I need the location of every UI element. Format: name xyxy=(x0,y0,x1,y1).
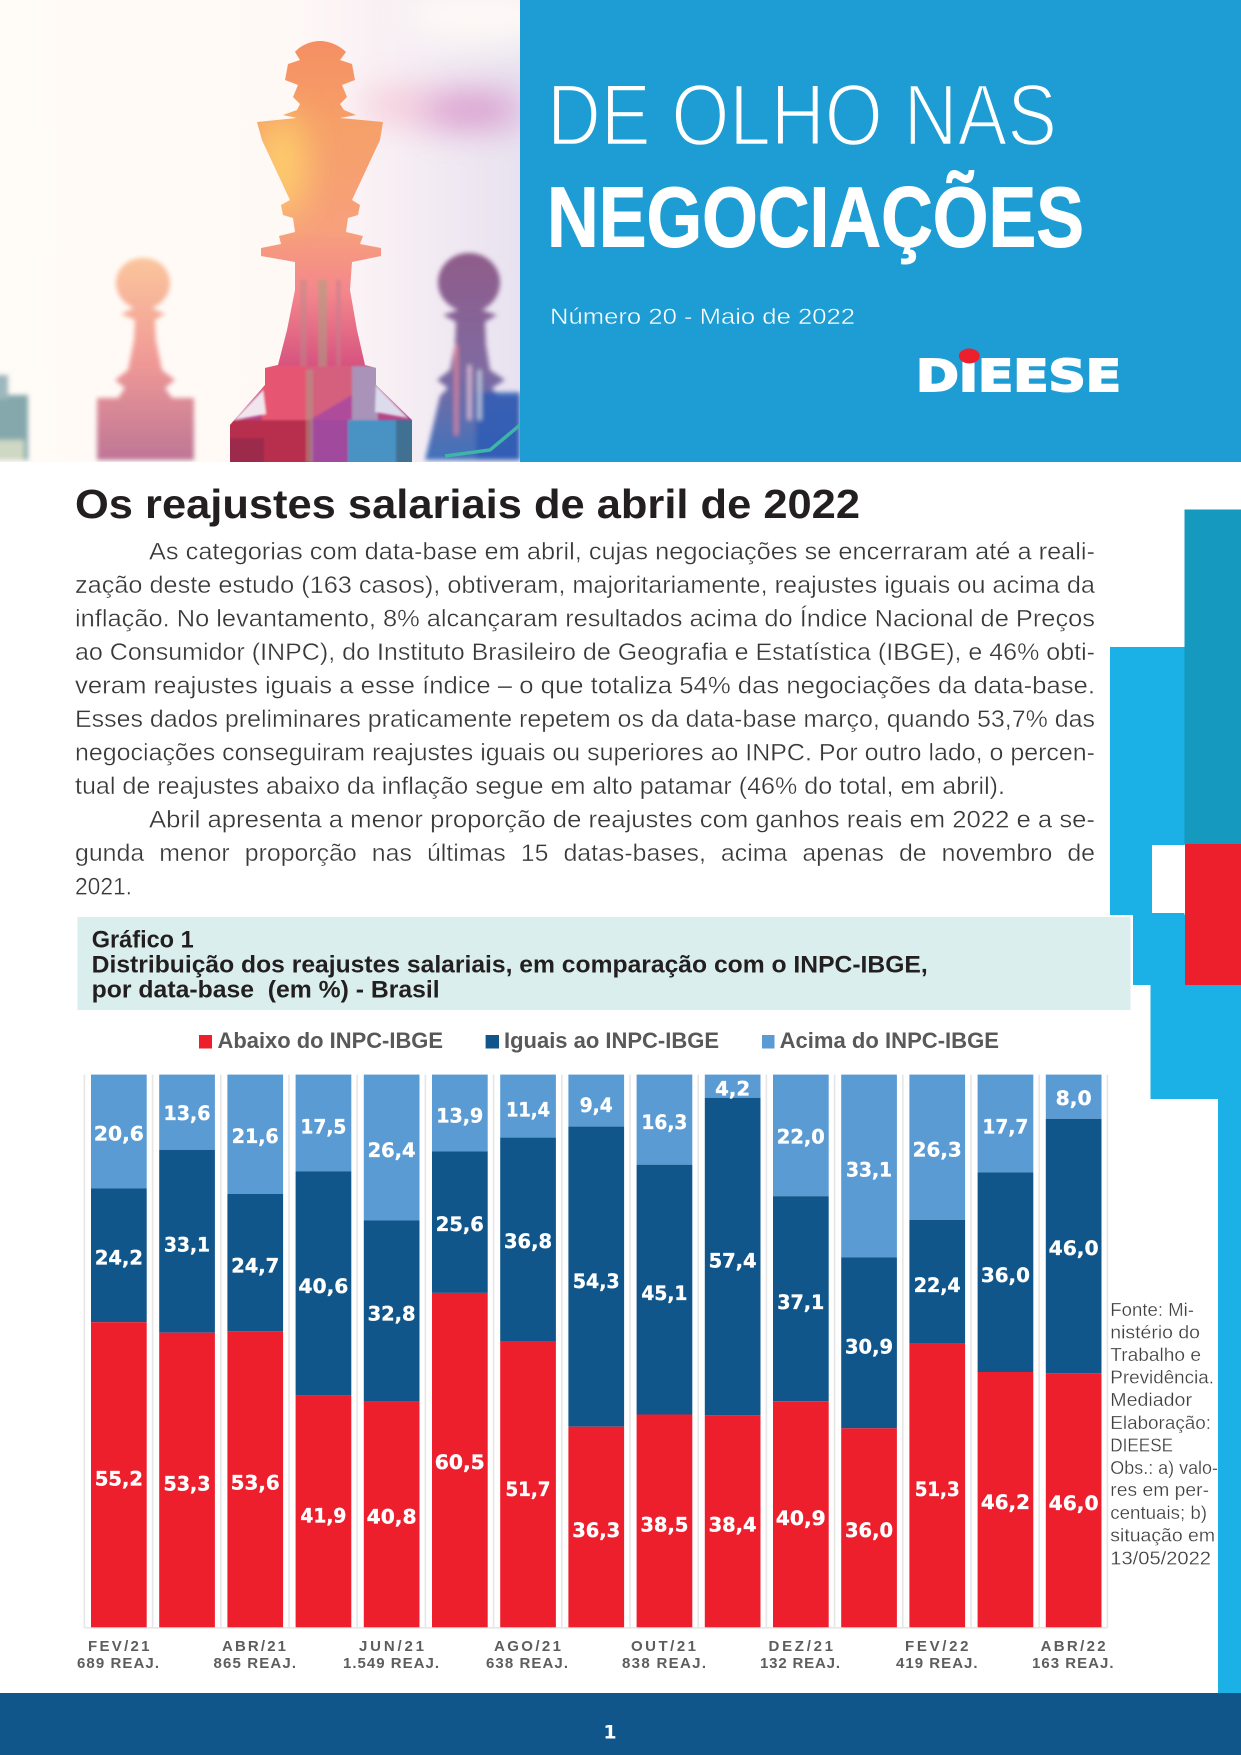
bar: ABR/22: 8,0 xyxy=(1056,1087,1092,1110)
source note: Obs.: a) valo- xyxy=(1110,1457,1218,1478)
x-axis labels: ABR/21 xyxy=(222,1638,286,1655)
source note: nistério do xyxy=(1110,1322,1200,1343)
icon: king chess piece xyxy=(225,35,420,465)
footer bar xyxy=(0,1693,1241,1755)
icon: right pawn xyxy=(425,253,520,460)
body text: negociações conseguiram reajustes iguais ou superiores ao INPC. Por outro lado, o percen- xyxy=(75,740,1095,767)
x-axis labels: 838 REAJ. xyxy=(622,1655,706,1672)
body text: Esses dados preliminares praticamente repetem os da data-base março, quando 53,7% das xyxy=(75,706,1095,733)
x-axis labels: 419 REAJ. xyxy=(896,1655,978,1672)
photo: chess pieces xyxy=(0,0,520,462)
icon: left edge pawn xyxy=(0,375,28,460)
icon: left pawn xyxy=(97,258,194,460)
x-axis labels: 865 REAJ. xyxy=(214,1655,296,1672)
bar: JUL/21: 13,9 xyxy=(436,1105,483,1128)
bar: MAR/22 xyxy=(978,1075,1033,1627)
bar: OUT/21: 38,5 xyxy=(640,1514,688,1537)
x-axis labels: 689 REAJ. xyxy=(77,1655,159,1672)
bar: NOV/21: 57,4 xyxy=(709,1250,757,1273)
bar: JUN/21: 26,4 xyxy=(368,1139,416,1162)
bar: JUN/21: 40,8 xyxy=(367,1506,417,1528)
x-axis labels: 132 REAJ. xyxy=(760,1655,840,1672)
source note: Previdência. xyxy=(1110,1366,1214,1387)
bar: DEZ/21 xyxy=(773,1075,829,1627)
bar: NOV/21: 38,4 xyxy=(709,1514,757,1537)
bar: FEV/22: 26,3 xyxy=(913,1138,962,1161)
chart title panel: Gráfico 1 xyxy=(92,927,194,954)
x-axis labels: DEZ/21 xyxy=(768,1638,833,1655)
bar: FEV/21: 20,6 xyxy=(94,1122,144,1146)
source note: Fonte: Mi- xyxy=(1110,1299,1194,1320)
issue number: Número 20 - Maio de 2022 xyxy=(550,304,855,329)
body text: gunda menor proporção nas últimas 15 datas-bases, acima apenas de novembro de xyxy=(75,840,1095,867)
bar: MAI/21: 40,6 xyxy=(298,1275,348,1298)
body text: ao Consumidor (INPC), do Instituto Brasileiro de Geografia e Estatística (IBGE), e 46% obti- xyxy=(75,639,1095,666)
bar: MAR/22: 17,7 xyxy=(982,1116,1028,1139)
x-axis labels: 638 REAJ. xyxy=(486,1655,568,1672)
logo: DIEESE: DIEESE xyxy=(916,351,1121,402)
stacked bar chart xyxy=(84,1075,1107,1628)
bar: SET/21: 54,3 xyxy=(573,1270,620,1293)
bar: JAN/22: 36,0 xyxy=(845,1519,893,1542)
bar: ABR/21: 24,7 xyxy=(231,1255,279,1278)
body text: inflação. No levantamento, 8% alcançaram resultados acima do Índice Nacional de Preços xyxy=(75,606,1095,633)
bar: JUL/21: 60,5 xyxy=(435,1451,485,1474)
bar: MAR/21: 53,3 xyxy=(164,1473,210,1496)
x-axis labels: 1.549 REAJ. xyxy=(343,1655,439,1672)
chart title panel: por data-base (em %) - Brasil xyxy=(92,976,440,1003)
bar: JUN/21 xyxy=(364,1075,420,1627)
chart title panel: Distribuição dos reajustes salariais, em comparação com o INPC-IBGE, xyxy=(92,952,928,979)
bar: MAR/22: 36,0 xyxy=(981,1264,1030,1287)
bar: FEV/21: 55,2 xyxy=(95,1468,143,1491)
legend xyxy=(199,1028,999,1053)
body text: veram reajustes iguais a esse índice – o que totaliza 54% das negociações da data-base. xyxy=(75,673,1095,700)
bar: MAI/21: 41,9 xyxy=(300,1505,346,1528)
bar: SET/21 xyxy=(568,1075,624,1627)
bar: FEV/21: 24,2 xyxy=(95,1246,143,1270)
bar: NOV/21 xyxy=(705,1075,760,1627)
bar: JUL/21 xyxy=(432,1075,488,1627)
title: De olho nas: DE OLHO NAS xyxy=(547,67,1057,164)
body text: tual de reajustes abaixo da inflação segue em alto patamar (46% do total, em abril). xyxy=(75,773,1005,800)
bar: SET/21: 9,4 xyxy=(580,1094,613,1117)
bar: MAR/21: 33,1 xyxy=(164,1234,210,1257)
bar: DEZ/21: 40,9 xyxy=(776,1507,826,1530)
bar: ABR/22: 46,0 xyxy=(1049,1237,1099,1260)
x-axis labels: FEV/22 xyxy=(905,1638,968,1655)
source note: DIEESE xyxy=(1110,1434,1173,1455)
decorative side blocks xyxy=(1110,510,1241,1693)
source note xyxy=(1110,1299,1218,1568)
bar: AGO/21: 36,8 xyxy=(504,1230,552,1253)
bar: SET/21: 36,3 xyxy=(572,1519,620,1542)
body text xyxy=(75,539,1095,901)
bar: AGO/21: 11,4 xyxy=(506,1098,550,1121)
bar: DEZ/21: 37,1 xyxy=(777,1291,824,1314)
bar: FEV/22: 51,3 xyxy=(915,1478,960,1501)
title: Negociações: NEGOCIAÇÕES xyxy=(547,170,1084,266)
bar: ABR/22: 46,0 xyxy=(1049,1492,1099,1515)
source note: 13/05/2022 xyxy=(1110,1547,1211,1568)
bar: FEV/22: 22,4 xyxy=(914,1274,961,1297)
body text: Abril apresenta a menor proporção de reajustes com ganhos reais em 2022 e a se- xyxy=(149,807,1095,834)
x-axis labels: AGO/21 xyxy=(494,1638,561,1655)
source note: situação em xyxy=(1110,1525,1215,1546)
bar: DEZ/21: 22,0 xyxy=(777,1126,825,1149)
x-axis labels xyxy=(77,1638,1114,1672)
body text: As categorias com data-base em abril, cujas negociações se encerraram até a reali- xyxy=(149,539,1095,566)
bar: ABR/21 xyxy=(227,1075,283,1627)
bar: OUT/21: 16,3 xyxy=(641,1111,687,1134)
bar: JAN/22 xyxy=(841,1075,897,1627)
x-axis labels: 163 REAJ. xyxy=(1032,1655,1114,1672)
page number: 1 xyxy=(603,1722,617,1744)
bar: OUT/21: 45,1 xyxy=(641,1282,687,1305)
bar: MAI/21: 17,5 xyxy=(300,1116,346,1139)
bar: NOV/21: 4,2 xyxy=(715,1077,750,1100)
bar: JAN/22: 33,1 xyxy=(846,1158,892,1182)
source note: Mediador xyxy=(1110,1389,1192,1410)
bar: AGO/21: 51,7 xyxy=(506,1478,550,1501)
heading: Os reajustes salariais de abril de 2022 xyxy=(75,481,860,527)
bar: FEV/22 xyxy=(909,1075,965,1627)
x-axis labels: ABR/22 xyxy=(1041,1638,1106,1655)
bar: ABR/22 xyxy=(1046,1075,1102,1627)
bar: FEV/21 xyxy=(91,1075,147,1627)
bar: AGO/21 xyxy=(500,1075,556,1627)
bar: JUN/21: 32,8 xyxy=(368,1303,416,1326)
bar: JUL/21: 25,6 xyxy=(436,1213,484,1236)
bar: ABR/21: 53,6 xyxy=(231,1471,280,1494)
bar: MAR/21: 13,6 xyxy=(164,1102,210,1125)
body text: zação deste estudo (163 casos), obtiveram, majoritariamente, reajustes iguais ou acima da xyxy=(75,572,1095,599)
bar: MAR/21 xyxy=(159,1075,215,1627)
bar: OUT/21 xyxy=(637,1075,692,1627)
bar: MAR/22: 46,2 xyxy=(981,1491,1030,1514)
source note: Elaboração: xyxy=(1110,1412,1211,1433)
source note: Trabalho e xyxy=(1110,1344,1201,1365)
bar: ABR/21: 21,6 xyxy=(232,1125,279,1148)
legend: Abaixo do INPC-IBGE xyxy=(218,1028,443,1053)
x-axis labels: JUN/21 xyxy=(359,1638,424,1655)
x-axis labels: FEV/21 xyxy=(88,1638,150,1655)
legend: Iguais ao INPC-IBGE xyxy=(504,1028,719,1053)
body text: 2021. xyxy=(75,874,132,901)
x-axis labels: OUT/21 xyxy=(631,1638,696,1655)
bar: MAI/21 xyxy=(296,1075,351,1627)
source note: res em per- xyxy=(1110,1479,1209,1500)
bar: JAN/22: 30,9 xyxy=(845,1335,893,1358)
chart title panel xyxy=(78,917,1130,1010)
header panel xyxy=(520,0,1241,462)
source note: centuais; b) xyxy=(1110,1502,1207,1523)
legend: Acima do INPC-IBGE xyxy=(780,1028,999,1053)
